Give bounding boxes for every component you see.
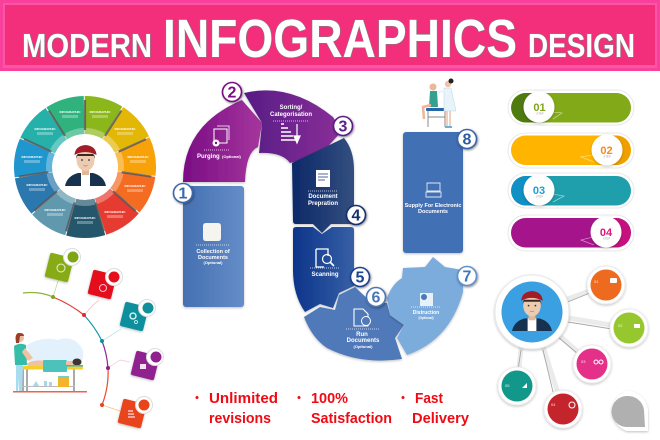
benefit: unlimited revisions bbox=[196, 390, 278, 427]
pill 03: 03 bbox=[533, 185, 545, 197]
step 1: collection of documents bbox=[183, 186, 244, 307]
process flow diagram: 2 bbox=[228, 84, 237, 102]
node 01 bbox=[587, 266, 625, 304]
pill 04 bbox=[508, 215, 634, 251]
process flow diagram: 5 bbox=[356, 270, 365, 286]
step 4: document preparation: Prepration bbox=[308, 201, 338, 207]
circular wheel infographic: INFOGRAPHIC bbox=[34, 127, 56, 131]
step 7: distruction: Distruction bbox=[413, 310, 439, 316]
benefit: 100% satisfaction: Satisfaction bbox=[311, 410, 392, 427]
step 7: distruction bbox=[387, 257, 463, 355]
pill 03: STEP bbox=[536, 194, 543, 198]
step 3: sorting and categorisation: Sorting/ bbox=[280, 105, 303, 111]
step 1: collection of documents: Documents bbox=[198, 255, 228, 261]
title: DESIGN bbox=[528, 27, 635, 64]
step pills bbox=[508, 90, 634, 251]
circular wheel infographic: INFOGRAPHIC bbox=[22, 155, 43, 159]
step 6: run documents: Documents bbox=[347, 338, 380, 344]
step 4: document preparation bbox=[292, 138, 354, 233]
pill 01 bbox=[508, 90, 634, 125]
central avatar node bbox=[495, 275, 569, 349]
pill 04: STEP bbox=[603, 236, 610, 240]
step 3: sorting and categorisation: Categorisation bbox=[270, 112, 312, 118]
process flow diagram: 3 bbox=[339, 118, 348, 136]
title: MODERN bbox=[22, 27, 152, 64]
process flow diagram: 8 bbox=[463, 132, 472, 148]
step 5: scanning: Scanning bbox=[311, 272, 339, 278]
step 8: supply for electronic documents bbox=[403, 132, 463, 253]
step 8: supply for electronic documents: Documents bbox=[418, 209, 448, 215]
node 03 bbox=[573, 345, 611, 383]
node 01: 01 bbox=[594, 279, 599, 284]
node 05 bbox=[498, 367, 536, 405]
process flow diagram bbox=[174, 82, 476, 361]
node 02 bbox=[610, 309, 648, 347]
title bbox=[22, 9, 635, 69]
circular wheel infographic: INFOGRAPHIC bbox=[128, 155, 149, 159]
icon: red tile bbox=[87, 268, 122, 300]
node 04 bbox=[544, 390, 582, 428]
number badges bbox=[174, 82, 476, 306]
benefits list bbox=[196, 390, 470, 427]
step 2: purging: (Optional) bbox=[222, 154, 242, 159]
step 4: document preparation: Document bbox=[308, 194, 338, 200]
step 5: scanning bbox=[293, 227, 354, 312]
benefit: unlimited revisions: revisions bbox=[209, 410, 271, 427]
node 05: 05 bbox=[505, 383, 510, 388]
step 7: distruction: (Optional) bbox=[418, 316, 434, 320]
header banner bbox=[0, 0, 660, 71]
icon: green tile bbox=[44, 248, 80, 283]
pill 01: STEP bbox=[536, 112, 544, 116]
node 04: 04 bbox=[551, 402, 556, 407]
step 2: purging: Purging bbox=[197, 154, 220, 160]
circular wheel infographic: INFOGRAPHIC bbox=[74, 216, 96, 220]
benefit: 100% satisfaction: 100% bbox=[311, 390, 348, 407]
circular wheel infographic: INFOGRAPHIC bbox=[114, 127, 136, 131]
circular wheel infographic: INFOGRAPHIC bbox=[60, 110, 81, 114]
pill 03 bbox=[508, 173, 634, 208]
process flow diagram: 7 bbox=[463, 268, 472, 286]
circular wheel infographic: INFOGRAPHIC bbox=[104, 210, 126, 214]
pill 02: STEP bbox=[603, 154, 611, 158]
process flow diagram: 6 bbox=[372, 290, 381, 306]
icon: purple tile bbox=[130, 348, 164, 381]
step 2: purging bbox=[183, 100, 262, 182]
benefit: unlimited revisions: Unlimited bbox=[209, 390, 278, 407]
circular wheel infographic: INFOGRAPHIC bbox=[44, 208, 66, 212]
step 6: run documents: (Optional) bbox=[354, 344, 373, 349]
pill 01: 01 bbox=[533, 102, 546, 114]
circular wheel infographic: INFOGRAPHIC bbox=[26, 183, 48, 187]
timeline arc with icons bbox=[13, 248, 164, 429]
circular wheel infographic bbox=[12, 94, 158, 240]
illustration: doctor and patient bbox=[423, 78, 456, 128]
circular wheel infographic: INFOGRAPHIC bbox=[124, 184, 146, 188]
step 6: run documents bbox=[304, 287, 404, 361]
benefit: fast delivery bbox=[402, 390, 470, 427]
step 6: run documents: Run bbox=[356, 332, 368, 338]
process flow diagram: 1 bbox=[179, 186, 188, 202]
node 02: 02 bbox=[618, 323, 623, 328]
icon: teal tile bbox=[119, 300, 156, 332]
pill 02 bbox=[508, 133, 634, 168]
benefit: fast delivery: Fast bbox=[415, 390, 443, 407]
process flow diagram: 4 bbox=[352, 208, 361, 224]
pill 04: 04 bbox=[600, 227, 613, 239]
step 1: collection of documents: (Optional) bbox=[204, 260, 223, 265]
step 8: supply for electronic documents: Supply For Electronic bbox=[405, 203, 461, 209]
grey teardrop bbox=[611, 391, 648, 431]
step 3: sorting and categorisation bbox=[244, 90, 342, 163]
circular wheel infographic: INFOGRAPHIC bbox=[90, 110, 111, 114]
icon: person avatar bbox=[65, 145, 106, 186]
pill 02: 02 bbox=[600, 145, 613, 157]
title: INFOGRAPHICS bbox=[163, 9, 517, 69]
icon: orange tile bbox=[117, 396, 152, 429]
network diagram bbox=[495, 266, 648, 431]
benefit: 100% satisfaction bbox=[298, 390, 392, 427]
illustration: massage table bbox=[13, 333, 87, 392]
step 1: collection of documents: Collection of bbox=[196, 249, 230, 255]
benefit: fast delivery: Delivery bbox=[412, 410, 470, 427]
node 03: 03 bbox=[581, 359, 586, 364]
